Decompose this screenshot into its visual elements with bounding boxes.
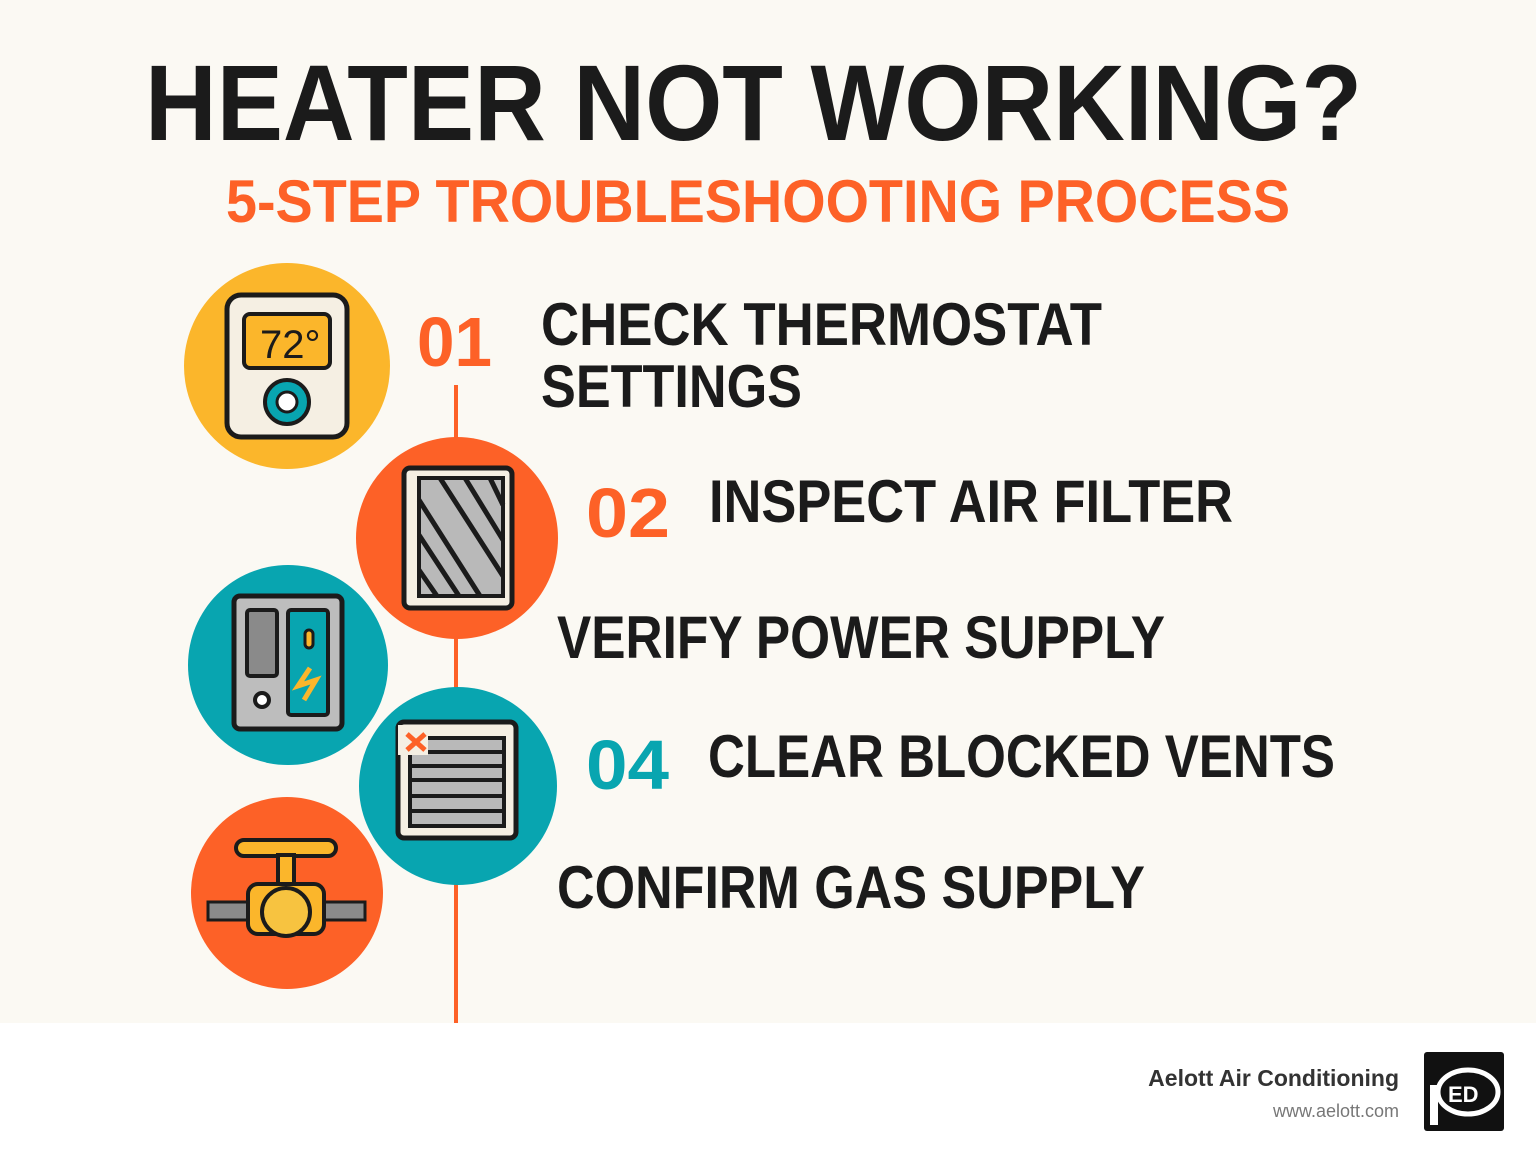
step 4 icon: blocked vent <box>359 687 557 885</box>
step 2 icon: air filter <box>356 437 558 639</box>
step 3 label: VERIFY POWER SUPPLY <box>557 604 1165 671</box>
subtitle: 5-STEP TROUBLESHOOTING PROCESS <box>226 168 1290 235</box>
footer brand <box>1148 1065 1399 1121</box>
step 5 label: CONFIRM GAS SUPPLY <box>557 854 1145 921</box>
step 1 label: CHECK THERMOSTAT <box>541 291 1102 358</box>
step 4 number: 04 <box>586 726 669 804</box>
footer logo <box>1424 1052 1504 1131</box>
footer brand: www.aelott.com <box>1272 1101 1399 1121</box>
step 1 label <box>541 291 1102 420</box>
step 2 number: 02 <box>586 474 670 552</box>
step 3 icon: power panel <box>188 565 388 765</box>
step 1 number: 01 <box>417 303 492 381</box>
step 4 label: CLEAR BLOCKED VENTS <box>708 723 1335 790</box>
footer logo: ED <box>1448 1082 1479 1107</box>
step 5 icon: gas valve <box>191 797 383 989</box>
step 1 icon: thermostat: 72° <box>260 323 320 367</box>
step 1 icon: thermostat <box>184 263 390 469</box>
title: HEATER NOT WORKING? <box>145 42 1362 163</box>
step 1 label: SETTINGS <box>541 353 802 420</box>
footer brand: Aelott Air Conditioning <box>1148 1065 1399 1091</box>
step 2 label: INSPECT AIR FILTER <box>709 468 1233 535</box>
timeline line <box>454 385 458 1023</box>
